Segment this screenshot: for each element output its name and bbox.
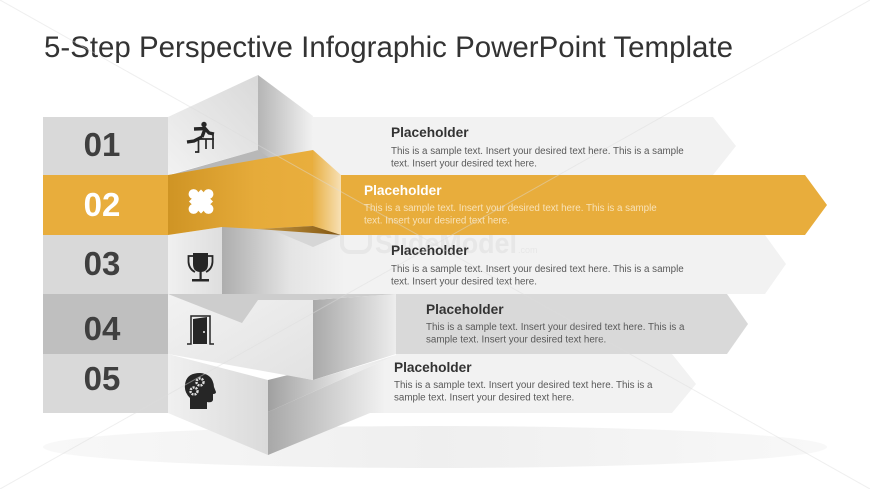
arrow 4 text: sample text. Insert your desired text here. <box>426 334 606 345</box>
arrow 1 heading: Placeholder <box>391 125 469 140</box>
block 4 <box>168 294 396 380</box>
block 5 <box>168 354 396 455</box>
arrow 3 text: text. Insert your desired text here. <box>391 276 537 287</box>
arrow 3 text: This is a sample text. Insert your desired text here. This is a sample <box>391 264 684 275</box>
gold arrow body: text. Insert your desired text here. <box>364 215 510 226</box>
title: 5-Step Perspective Infographic PowerPoint Template <box>44 31 733 64</box>
arrow 5 <box>396 354 696 413</box>
icon: hurdle runner <box>187 122 214 152</box>
arrow 4 text: This is a sample text. Insert your desired text here. This is a <box>426 322 684 333</box>
numbers: 03 <box>84 245 120 282</box>
numbers: 04 <box>84 310 121 347</box>
arrow 4 text <box>426 302 685 345</box>
arrow 5 text: Placeholder <box>394 360 472 375</box>
gear lower <box>190 388 198 394</box>
numbers: 05 <box>84 360 120 397</box>
watermark: SlideModel <box>375 228 517 260</box>
numbers: 02 <box>84 186 120 223</box>
icon: head with gears <box>185 373 216 409</box>
bar 05 <box>43 354 168 413</box>
gear upper <box>196 378 204 386</box>
block 3 <box>168 226 395 294</box>
icon: puzzle piece <box>179 180 223 223</box>
arrow 5 text: This is a sample text. Insert your desired text here. This is a <box>394 380 652 391</box>
number bars <box>43 117 168 413</box>
arrow 3 text: Placeholder <box>391 243 469 258</box>
arrow 4 text: Placeholder <box>426 302 504 317</box>
bar 04 <box>43 294 168 354</box>
bar 01 <box>43 117 168 175</box>
floor shadow <box>43 426 827 468</box>
icon: door <box>187 316 214 344</box>
numbers <box>84 126 121 397</box>
gold band <box>168 150 827 235</box>
bar 03 <box>43 235 168 294</box>
arrow 1 <box>312 117 736 175</box>
arrow 5 text <box>394 360 653 403</box>
watermark <box>342 224 538 260</box>
shadow below gold band <box>268 226 341 247</box>
arrow 3 <box>222 235 786 294</box>
arrow 5 text: sample text. Insert your desired text here. <box>394 392 574 403</box>
arrow 1 body: text. Insert your desired text here. <box>391 158 537 169</box>
gold arrow heading: Placeholder <box>364 183 442 198</box>
block 1 <box>168 75 313 175</box>
gold arrow body: This is a sample text. Insert your desired text here. This is a sample <box>364 203 657 214</box>
bar 02 <box>43 175 168 235</box>
arrow 3 text <box>391 243 684 287</box>
watermark: .com <box>518 245 538 255</box>
icon: trophy <box>188 253 212 282</box>
arrow 1 body: This is a sample text. Insert your desired text here. This is a sample <box>391 146 684 157</box>
numbers: 01 <box>84 126 120 163</box>
arrow 4 <box>396 294 748 354</box>
